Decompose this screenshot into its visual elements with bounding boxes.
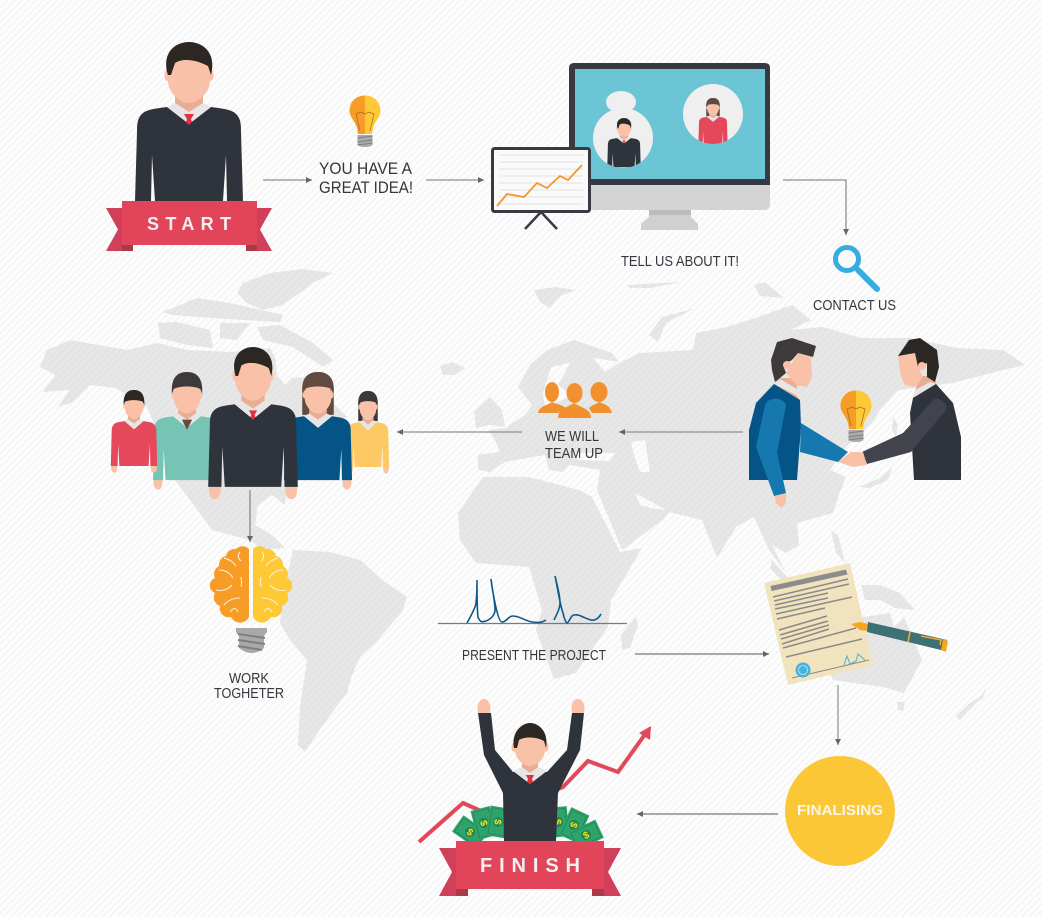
growth arrow	[419, 726, 651, 842]
icon: handshake bulb	[840, 390, 872, 442]
person: yellow	[347, 391, 389, 474]
map seas	[275, 352, 666, 510]
arrow: finalising to finish	[637, 813, 778, 815]
circle: finalising	[785, 756, 895, 866]
arrow: contract to finalising	[837, 685, 839, 745]
icon: orange team	[538, 382, 612, 418]
pen	[851, 622, 948, 652]
text: work together: TOGHETER	[214, 686, 284, 702]
icon: magnifier	[836, 248, 877, 289]
banner: finish	[439, 841, 621, 896]
arrow: handshake to team	[619, 431, 743, 433]
arrow: idea to chart	[426, 179, 484, 181]
text: work together: WORK	[229, 671, 269, 687]
person on screen: woman	[698, 98, 728, 148]
text: team up: WE WILL	[545, 429, 599, 445]
contract document	[764, 563, 873, 685]
person: blue	[284, 372, 352, 490]
icon: brain bulb	[210, 546, 292, 653]
arrow: monitor to contact	[783, 180, 846, 235]
person: finish	[478, 699, 584, 841]
text: tell us: TELL US ABOUT IT!	[621, 254, 739, 270]
person: start	[135, 42, 243, 215]
text: present the project: PRESENT THE PROJECT	[462, 648, 606, 664]
text: great idea	[319, 160, 413, 197]
arrow: team up to people	[397, 431, 522, 433]
person on screen: man	[607, 118, 641, 172]
circle: finalising: FINALISING	[797, 802, 883, 819]
monitor	[569, 63, 770, 230]
money bills	[452, 805, 604, 850]
person: teal	[153, 372, 221, 490]
text: contact us: CONTACT US	[813, 298, 896, 314]
team of people	[111, 347, 389, 499]
banner: start	[106, 201, 272, 251]
handshake figures	[749, 338, 961, 508]
person: red	[111, 390, 157, 473]
arrow: team to brain	[249, 490, 251, 542]
icon: idea bulb	[350, 96, 380, 147]
text: great idea: YOU HAVE A	[319, 160, 412, 178]
hands	[838, 452, 867, 467]
text: great idea: GREAT IDEA!	[319, 179, 413, 197]
signature	[438, 576, 627, 624]
text: work together	[214, 671, 284, 702]
arrow: start to idea	[263, 179, 312, 181]
text: team up	[545, 429, 603, 462]
person: lead	[208, 347, 298, 499]
left man	[749, 338, 848, 508]
world map	[40, 269, 1025, 752]
presentation chart	[492, 148, 590, 229]
right man	[862, 338, 961, 480]
arrow: project to contract	[635, 653, 769, 655]
finish group	[419, 699, 651, 896]
text: team up: TEAM UP	[545, 446, 603, 462]
banner: finish: FINISH	[480, 855, 580, 877]
banner: start: START	[147, 214, 231, 234]
